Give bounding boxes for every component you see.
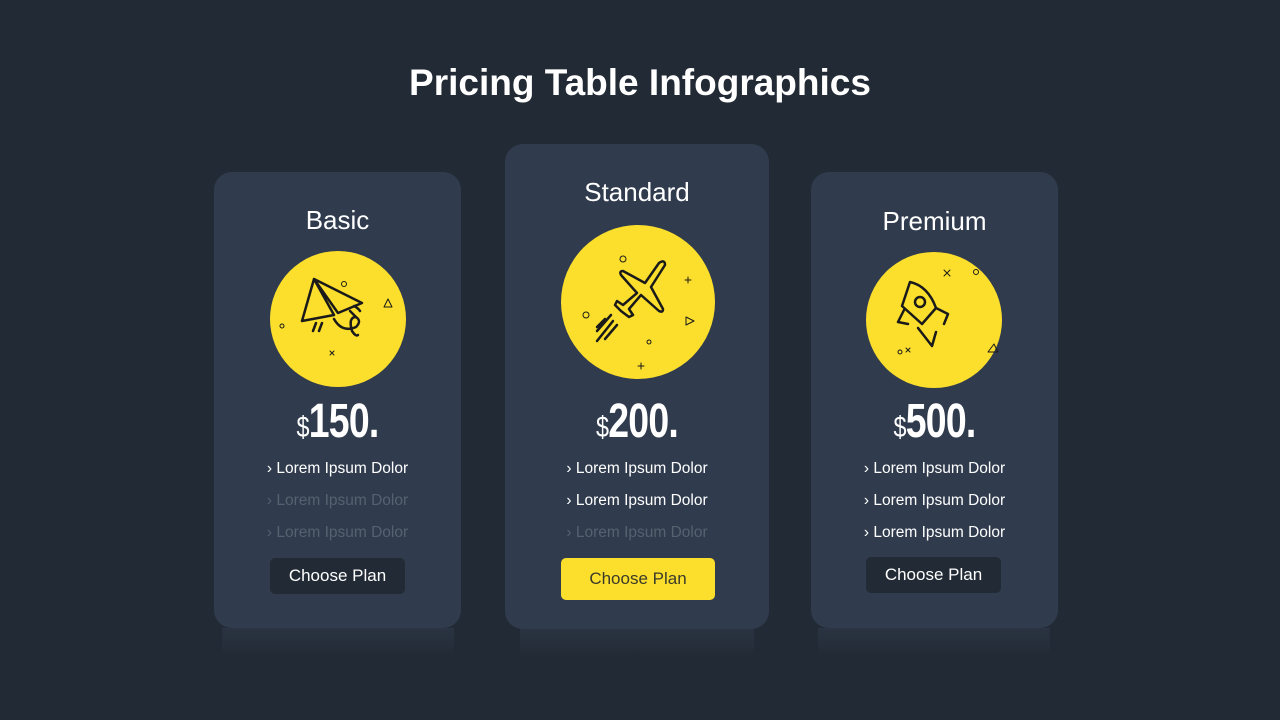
panel: premium [811,172,1058,628]
heading: basic: Basic [306,205,369,235]
panel: basic [214,172,461,628]
button: Choose Plan [589,569,687,588]
heading: premium: Premium [882,206,986,236]
features [566,460,708,541]
features: › Lorem Ipsum Dolor [267,524,408,541]
features: › Lorem Ipsum Dolor [566,492,708,509]
features: › Lorem Ipsum Dolor [864,524,1005,541]
price: 150: $150. [297,395,378,448]
button [561,558,715,600]
features: › Lorem Ipsum Dolor [864,492,1005,509]
features: › Lorem Ipsum Dolor [566,460,708,477]
features: › Lorem Ipsum Dolor [864,460,1005,477]
price: 200: $200. [596,395,678,448]
button: Choose Plan [289,566,386,585]
button [270,558,405,594]
shadow under cards [222,628,454,656]
icon: rocket [866,252,1002,388]
icon: paper plane [270,251,406,387]
heading: standard: Standard [584,177,690,207]
button: Choose Plan [885,565,982,584]
icon: airplane [561,225,715,379]
panel: standard [505,144,769,629]
features [267,460,408,541]
title: Pricing Table Infographics [409,62,871,103]
button [866,557,1001,593]
features: › Lorem Ipsum Dolor [267,460,408,477]
features: › Lorem Ipsum Dolor [566,524,708,541]
features [864,460,1005,541]
price: 500: $500. [894,395,975,448]
features: › Lorem Ipsum Dolor [267,492,408,509]
